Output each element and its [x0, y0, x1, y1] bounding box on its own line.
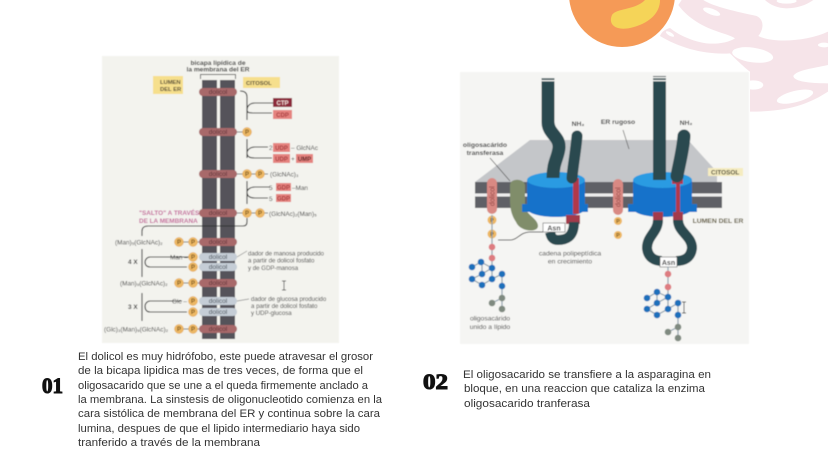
label: lumen [153, 76, 183, 94]
text block: step 02: bloque, en una reaccion que cataliza la enzima [464, 383, 706, 395]
label: flip across the membrane: "SALTO" A TRAVÉS [139, 208, 200, 217]
text block: step 01 [78, 351, 383, 449]
Asn boxes [543, 223, 677, 267]
polypeptide chains [548, 76, 692, 261]
diagram labels: NH₂ [572, 121, 584, 128]
phosphate letters: P [177, 327, 181, 333]
text block: step 02: oligosacarido tranferasa [464, 398, 591, 410]
nucleotide boxes: CDP [276, 113, 289, 119]
biochemical labels [104, 145, 327, 334]
text cursor glyph [282, 281, 286, 290]
dolichol pills: dolicol [209, 298, 228, 305]
biochemical labels: –Man [292, 185, 308, 192]
phosphate letters: P [245, 211, 249, 217]
phosphate letters: P [191, 281, 195, 287]
nucleotide boxes: UMP [298, 157, 311, 163]
translocon left [522, 172, 588, 224]
diagram labels: transferasa [467, 150, 504, 157]
oligosaccharide tree right [644, 267, 681, 341]
phosphate letters: P [191, 255, 195, 261]
biochemical labels: a partir de dolicol fosfato [251, 303, 318, 310]
phosphate letters: P [245, 172, 249, 178]
phosphate letters: P [258, 172, 262, 178]
diagram labels: en crecimiento [548, 258, 592, 266]
label: flip across the membrane: DE LA MEMBRANA [139, 218, 198, 225]
dolichol anchors: dolicol [490, 186, 496, 206]
transfer arrow [498, 232, 543, 240]
biochemical labels: (Glc)₃(Man)₉(GlcNAc)₂ [104, 326, 169, 334]
biochemical labels: y de GDP-manosa [248, 265, 299, 272]
diagram labels: oligosacárido [470, 316, 510, 322]
phosphate letters: P [191, 299, 195, 305]
diagram labels: cadena polipeptídica [539, 250, 601, 258]
phosphates [488, 216, 622, 239]
phosphate letters: P [191, 265, 195, 271]
step number 02: 02 [423, 369, 448, 394]
diagram labels [463, 119, 744, 331]
label: flip across the membrane [139, 208, 200, 225]
nucleotide boxes [273, 98, 313, 202]
heading: bilayer label: bicapa lipídica de [191, 60, 246, 67]
biochemical labels: 3 X [128, 304, 138, 311]
diagram labels: LUMEN DEL ER [693, 218, 744, 225]
panel: oligosaccharide transfer diagram: P [490, 232, 494, 238]
second dolichol anchor: dolicol [616, 187, 622, 207]
heading: bilayer label: la membrana del ER [186, 66, 250, 74]
dolichol pills: dolicol [209, 129, 228, 136]
diagram labels: ER rugoso [601, 119, 635, 126]
label: lumen: DEL ER [160, 87, 182, 93]
biochemical labels: + [291, 156, 295, 163]
text block: step 02 [463, 369, 711, 410]
text block: step 01: la membrana. La sinstesis de oligonucleotido comienza en la [78, 394, 383, 406]
ER membrane plane [475, 140, 717, 182]
label: lumen: LUMEN [160, 80, 181, 86]
nucleotide boxes: UDP [275, 146, 288, 152]
label: cytosol [708, 168, 743, 177]
connector dashes [183, 132, 268, 329]
text block: step 01: El dolicol es muy hidrófobo, este puede atravesar el grosor [78, 351, 373, 363]
nucleotide boxes: UDP [275, 157, 288, 163]
phosphate letters: P [177, 240, 181, 246]
phosphate letters [177, 130, 262, 333]
dolichol pills: dolicol [209, 239, 228, 246]
panel: oligosaccharide transfer diagram: Asn [662, 260, 675, 267]
dolichol pills: dolicol [209, 264, 228, 271]
dolichol anchors [487, 178, 497, 214]
biochemical labels: (Man)₉(GlcNAc)₂ [120, 280, 168, 288]
text block: step 01: lumina, despues de que el lipido intermediario haya sido [78, 423, 360, 435]
phosphate letters: P [245, 130, 249, 136]
panel: oligosaccharide transfer diagram: P [490, 218, 494, 224]
translocon right [628, 172, 697, 221]
diagram labels: NH₂ [680, 120, 692, 127]
panel: dolichol synthesis diagram [102, 56, 339, 343]
dolichol pills: dolicol [209, 326, 228, 333]
decorative pink swirl background [660, 0, 828, 112]
orange circle decoration [569, 0, 675, 47]
text block: step 01: de la bicapa lipidica mas de tres veces, de forma que el [78, 365, 363, 377]
phosphate letters: P [191, 327, 195, 333]
text block: step 01: oligosacarido que se une a el queda firmemente anclado a [78, 380, 369, 392]
biochemical labels: a partir de dolicol fosfato [248, 258, 315, 264]
dolichol pills: dolicol [209, 210, 228, 217]
biochemical labels: (GlcNAc)₃ [270, 172, 299, 178]
phosphate letters: P [177, 281, 181, 287]
dolichol pills: dolicol [209, 171, 228, 178]
nucleotide boxes: GDP [277, 196, 290, 202]
diagram labels: unido a lípido [470, 324, 510, 331]
diagram labels: oligosacárido [463, 142, 507, 149]
biochemical labels: (GlcNAc)₂(Man)₅ [269, 211, 317, 218]
membrane bilayer bars [202, 80, 235, 339]
panel: oligosaccharide transfer diagram: P [616, 233, 620, 239]
panel: oligosaccharide transfer diagram: Asn [547, 226, 561, 232]
membrane bilayer [475, 182, 722, 208]
phosphate letters: P [191, 240, 195, 246]
oligosaccharide tree left [469, 215, 505, 312]
biochemical labels: 5 [269, 196, 273, 203]
dolichol pills: dolicol [209, 89, 228, 96]
text block: step 02: El oligosacarido se transfiere a la asparagina en [463, 369, 711, 381]
panel: oligosaccharide transfer diagram: P [616, 219, 620, 225]
second dolichol anchor [613, 179, 623, 215]
text block: step 01: cara sistólica de membrana del ER y continua sobre la cara [78, 408, 381, 420]
biochemical labels: Man – [170, 254, 188, 262]
chain end stripes [541, 77, 667, 81]
biochemical labels: y UDP-glucosa [251, 310, 292, 317]
biochemical labels: dador de glucosa producido [251, 296, 327, 303]
text cursor glyph [682, 302, 686, 313]
panel: oligosaccharide transfer diagram [460, 72, 749, 344]
arrows and brackets [142, 91, 273, 321]
biochemical labels: (Man)₅(GlcNAc)₂ [115, 240, 163, 246]
label: cytosol [243, 77, 280, 88]
dolichol pills: dolicol [209, 280, 228, 287]
nucleotide boxes: GDP [277, 186, 290, 192]
dolichol pills [199, 88, 237, 333]
text block: step 01: tranferido a través de la membrana [78, 437, 261, 449]
biochemical labels: 5 [269, 185, 273, 192]
biochemical labels: 2 [269, 145, 273, 152]
phosphate letters: P [191, 310, 195, 316]
nucleotide boxes: CTP [276, 101, 288, 107]
label: cytosol: CITOSOL [711, 170, 739, 177]
step number 01: 01 [42, 373, 63, 398]
leader lines [490, 130, 629, 181]
biochemical labels: – GlcNAc [291, 145, 319, 152]
phosphate letters: P [258, 211, 262, 217]
biochemical labels: 4 X [128, 259, 138, 266]
biochemical labels: dador de manosa producido [248, 250, 324, 258]
enzyme: oligosaccharide transferase [510, 180, 538, 231]
biochemical labels: Glc – [172, 298, 187, 306]
phosphate groups [174, 128, 264, 334]
dolichol pills: dolicol [209, 309, 228, 316]
heading: bilayer label [186, 60, 250, 79]
dolichol pills: dolicol [209, 254, 228, 261]
label: cytosol: CITOSOL [246, 81, 272, 87]
